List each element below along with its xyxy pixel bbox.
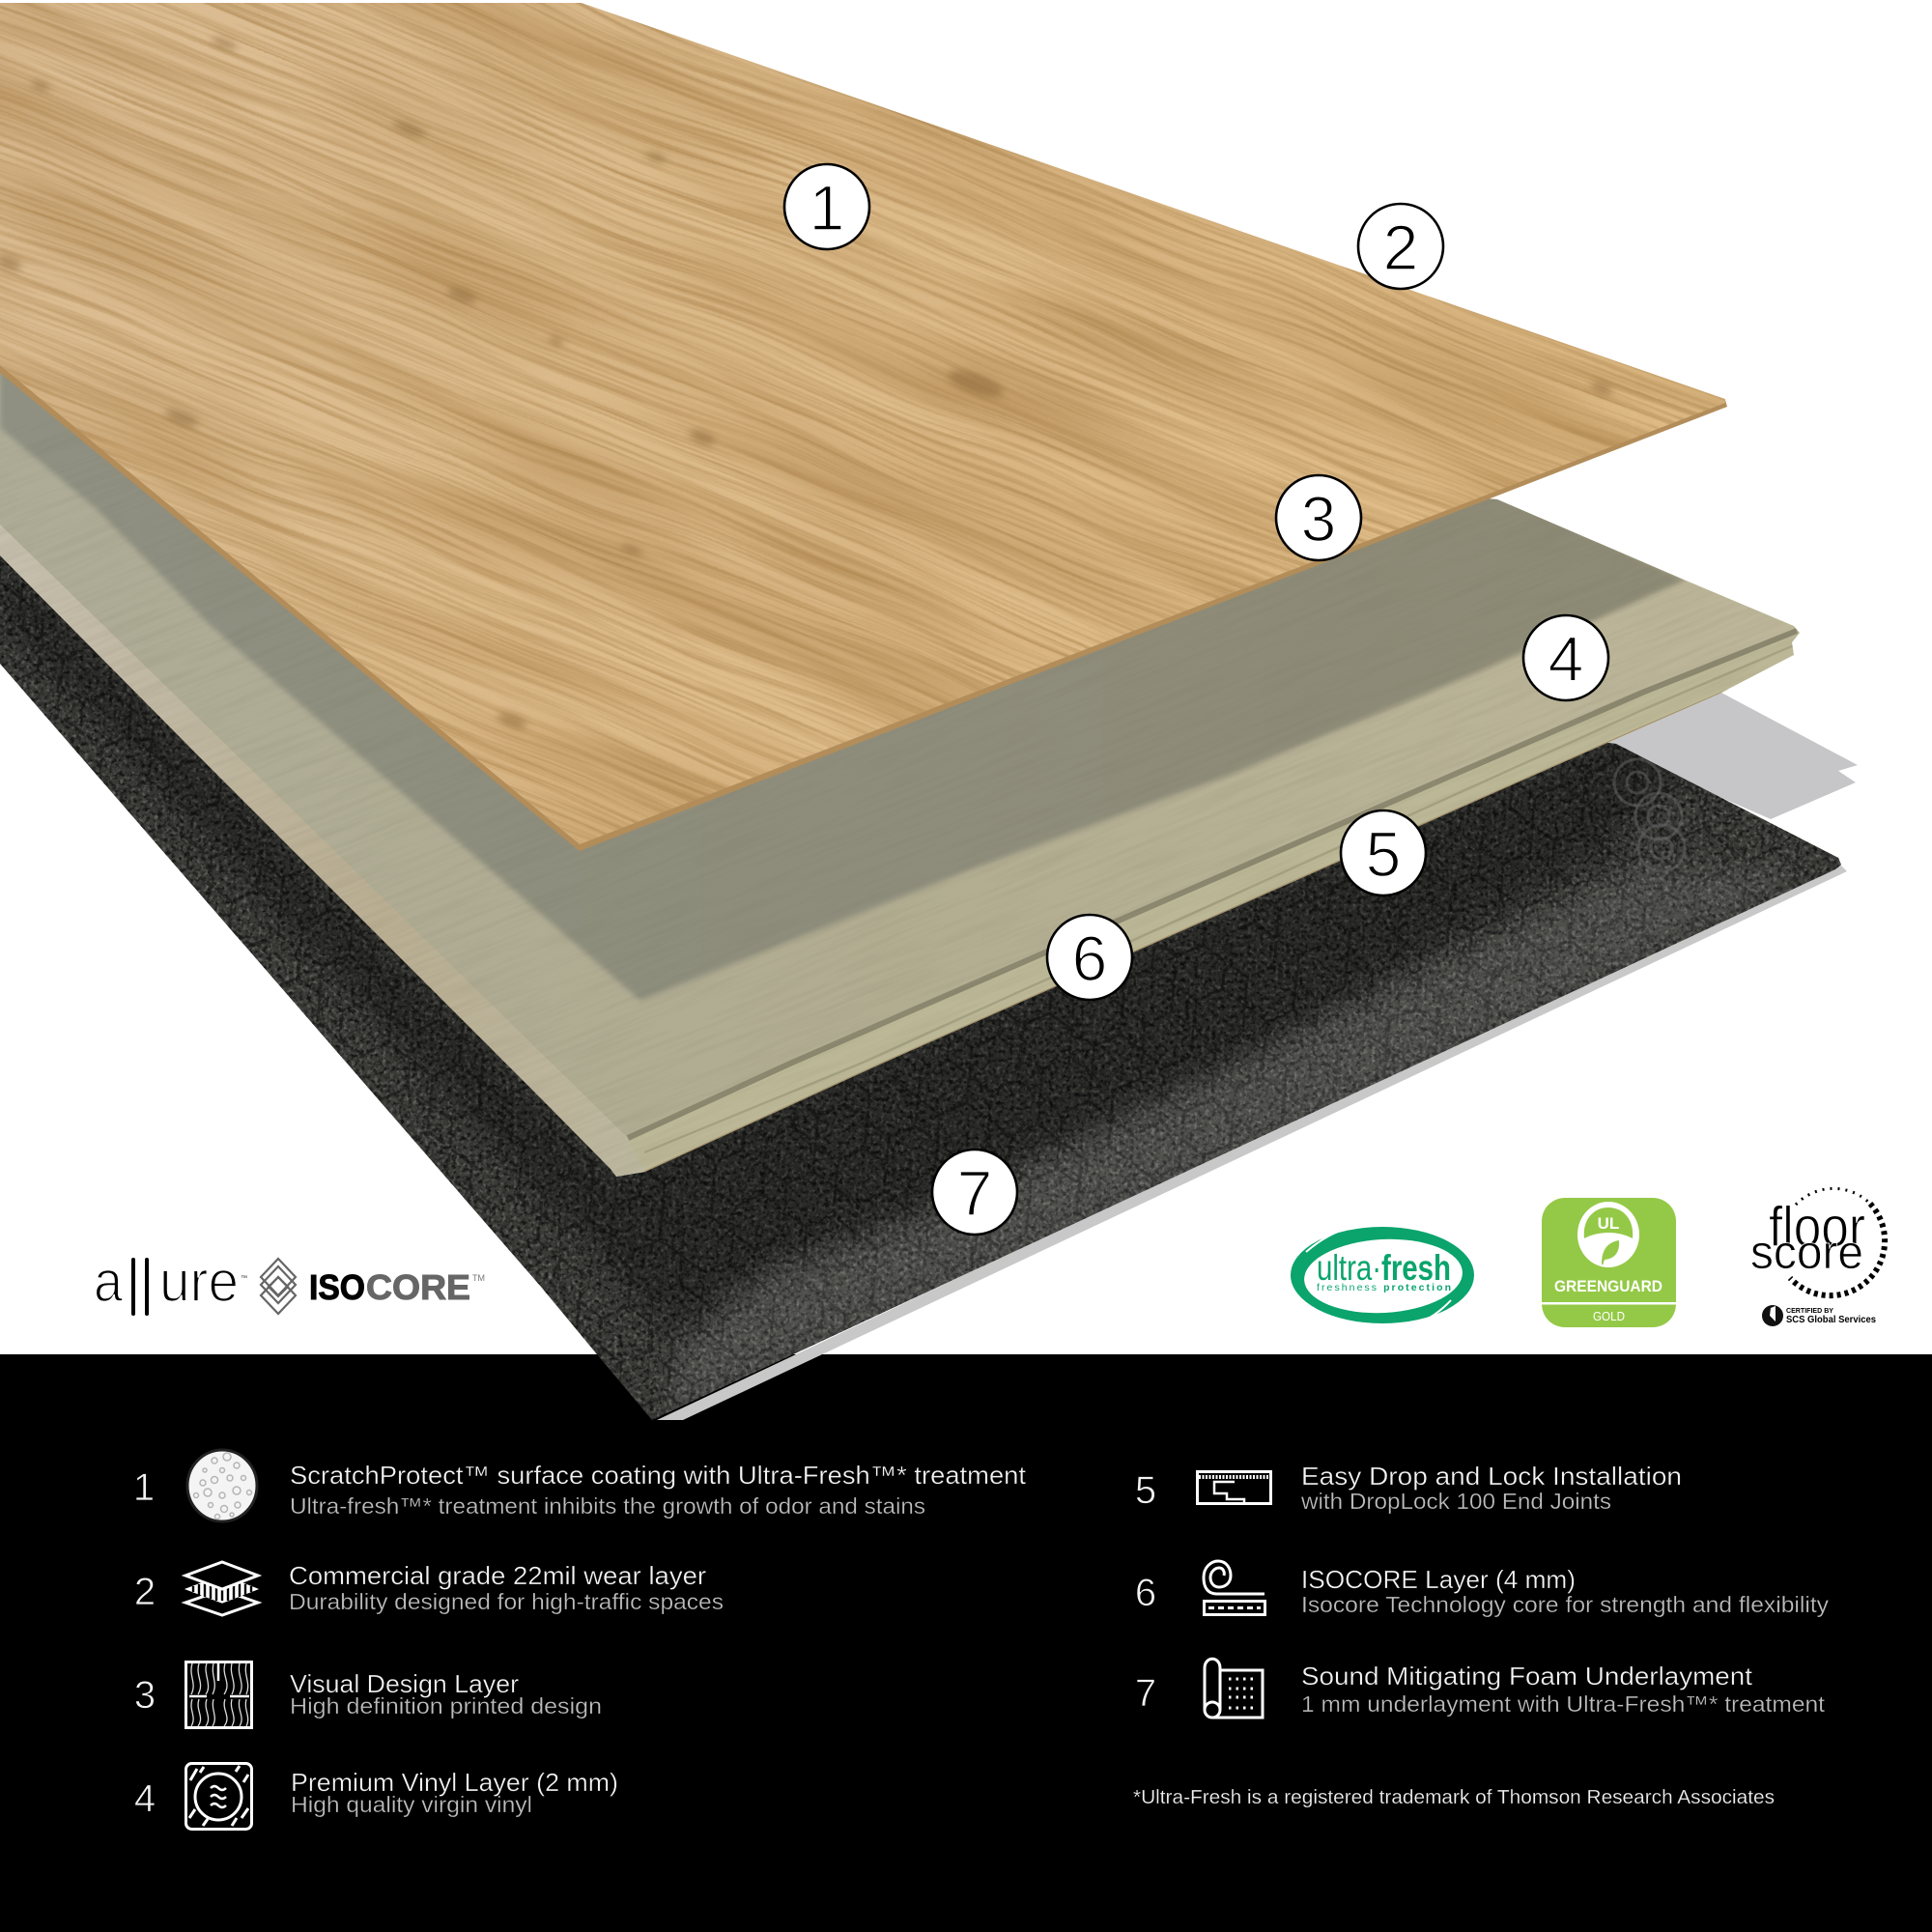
black legend band <box>0 1354 1932 1932</box>
icon: stacked wear layer diamonds <box>185 1562 258 1615</box>
wood knots <box>0 35 1614 731</box>
logo: UL GREENGUARD Gold <box>1542 1198 1676 1327</box>
logo: allure ISOCORE: ISO <box>309 1267 365 1307</box>
callout 6: 6 <box>1072 923 1107 994</box>
icon: rolled core layer <box>1204 1561 1265 1615</box>
legend item 3: 3 <box>134 1674 156 1717</box>
darker grain blotches <box>33 75 1575 605</box>
legend item 4 <box>134 1764 618 1830</box>
callout 7 <box>932 1150 1017 1235</box>
logo: FloorScore certified by SCS: score <box>1750 1227 1863 1279</box>
logo: UL GREENGUARD Gold: GOLD <box>1593 1309 1625 1323</box>
legend item 2: 2 <box>134 1571 156 1613</box>
legend item 7 <box>1135 1659 1825 1718</box>
logo: allure ISOCORE: TM <box>472 1273 485 1283</box>
callout 3 <box>1276 475 1361 560</box>
legend item 7: 1 mm underlayment with Ultra-Fresh™* treatment <box>1301 1691 1825 1717</box>
legend item 1: Ultra-fresh™* treatment inhibits the growth of odor and stains <box>290 1493 925 1519</box>
callout 2: 2 <box>1383 212 1418 283</box>
icon: underlayment roll <box>1205 1659 1263 1718</box>
legend item 1 <box>133 1450 1027 1521</box>
legend item 6: ISOCORE Layer (4 mm) <box>1301 1565 1576 1594</box>
logo: ultra-fresh: ultra·fresh <box>1317 1248 1451 1288</box>
callout 7: 7 <box>957 1157 992 1229</box>
logo: allure ISOCORE: CORE <box>366 1267 470 1307</box>
logo: allure ISOCORE <box>94 1249 485 1316</box>
legend item 5: with DropLock 100 End Joints <box>1300 1489 1611 1514</box>
logo: ultra-fresh: freshness protection <box>1317 1282 1451 1293</box>
legend item 6: Isocore Technology core for strength and flexibility <box>1301 1592 1829 1617</box>
callout 5 <box>1341 810 1426 895</box>
legend item 2: Commercial grade 22mil wear layer <box>289 1561 706 1590</box>
cast shadow behind underlayment <box>657 692 1858 1420</box>
legend item 3: High definition printed design <box>290 1693 602 1719</box>
flooring layer stack illustration <box>0 3 1858 1420</box>
logo: UL GREENGUARD Gold: GREENGUARD <box>1554 1277 1662 1295</box>
legend item 4: High quality virgin vinyl <box>291 1792 532 1817</box>
callout 6 <box>1047 915 1132 1000</box>
legend item 7: 7 <box>1135 1672 1156 1715</box>
legend item 1: ScratchProtect™ surface coating with Ultra-Fresh™* treatment <box>290 1461 1027 1490</box>
logo: FloorScore certified by SCS: CERTIFIED BY <box>1786 1306 1833 1315</box>
layer 7: foam underlayment <box>0 541 1855 1430</box>
footnote: *Ultra-Fresh is a registered trademark of Thomson Research Associates <box>1133 1787 1775 1808</box>
legend item 5: 5 <box>1135 1469 1156 1512</box>
callout 2 <box>1358 204 1443 289</box>
icon: drop and lock joint <box>1198 1472 1271 1505</box>
legend item 7: Sound Mitigating Foam Underlayment <box>1301 1662 1753 1690</box>
legend item 3: Visual Design Layer <box>290 1669 519 1698</box>
icon: wood grain print <box>185 1662 251 1727</box>
legend item 2: Durability designed for high-traffic spaces <box>289 1589 724 1614</box>
logo: allure ISOCORE: ™ <box>241 1275 247 1282</box>
logo: allure ISOCORE: a <box>94 1249 124 1314</box>
legend item 3 <box>134 1662 602 1727</box>
layer 6 and 5: ISOCORE core with DropLock edge <box>0 373 1800 1177</box>
legend item 6: 6 <box>1135 1572 1156 1614</box>
logo: allure ISOCORE: ure <box>159 1249 239 1314</box>
legend item 4: 4 <box>134 1777 156 1820</box>
callout 1 <box>784 164 869 249</box>
legend item 5 <box>1135 1462 1682 1514</box>
callout 5: 5 <box>1366 818 1401 890</box>
icon: vinyl layer in rounded square <box>185 1764 251 1830</box>
callout 3: 3 <box>1301 483 1336 554</box>
logo: UL GREENGUARD Gold: UL <box>1598 1214 1619 1233</box>
legend item 4: Premium Vinyl Layer (2 mm) <box>291 1768 618 1797</box>
legend item 5: Easy Drop and Lock Installation <box>1301 1462 1682 1491</box>
logo: FloorScore certified by SCS: floor <box>1769 1196 1865 1259</box>
callout 4 <box>1523 615 1608 700</box>
logo: FloorScore certified by SCS: SCS Global Services <box>1786 1314 1876 1325</box>
legend item 2 <box>134 1561 724 1615</box>
logo: FloorScore certified by SCS <box>1750 1188 1885 1326</box>
logo: ultra-fresh <box>1291 1227 1474 1324</box>
icon: scratch-protect droplet surface <box>187 1450 257 1521</box>
legend item 1: 1 <box>133 1466 155 1509</box>
legend item 6 <box>1135 1561 1829 1617</box>
layer 1-3: wood plank with wear layer <box>0 3 1727 851</box>
callout 4: 4 <box>1548 623 1583 695</box>
callout 1: 1 <box>810 172 844 243</box>
